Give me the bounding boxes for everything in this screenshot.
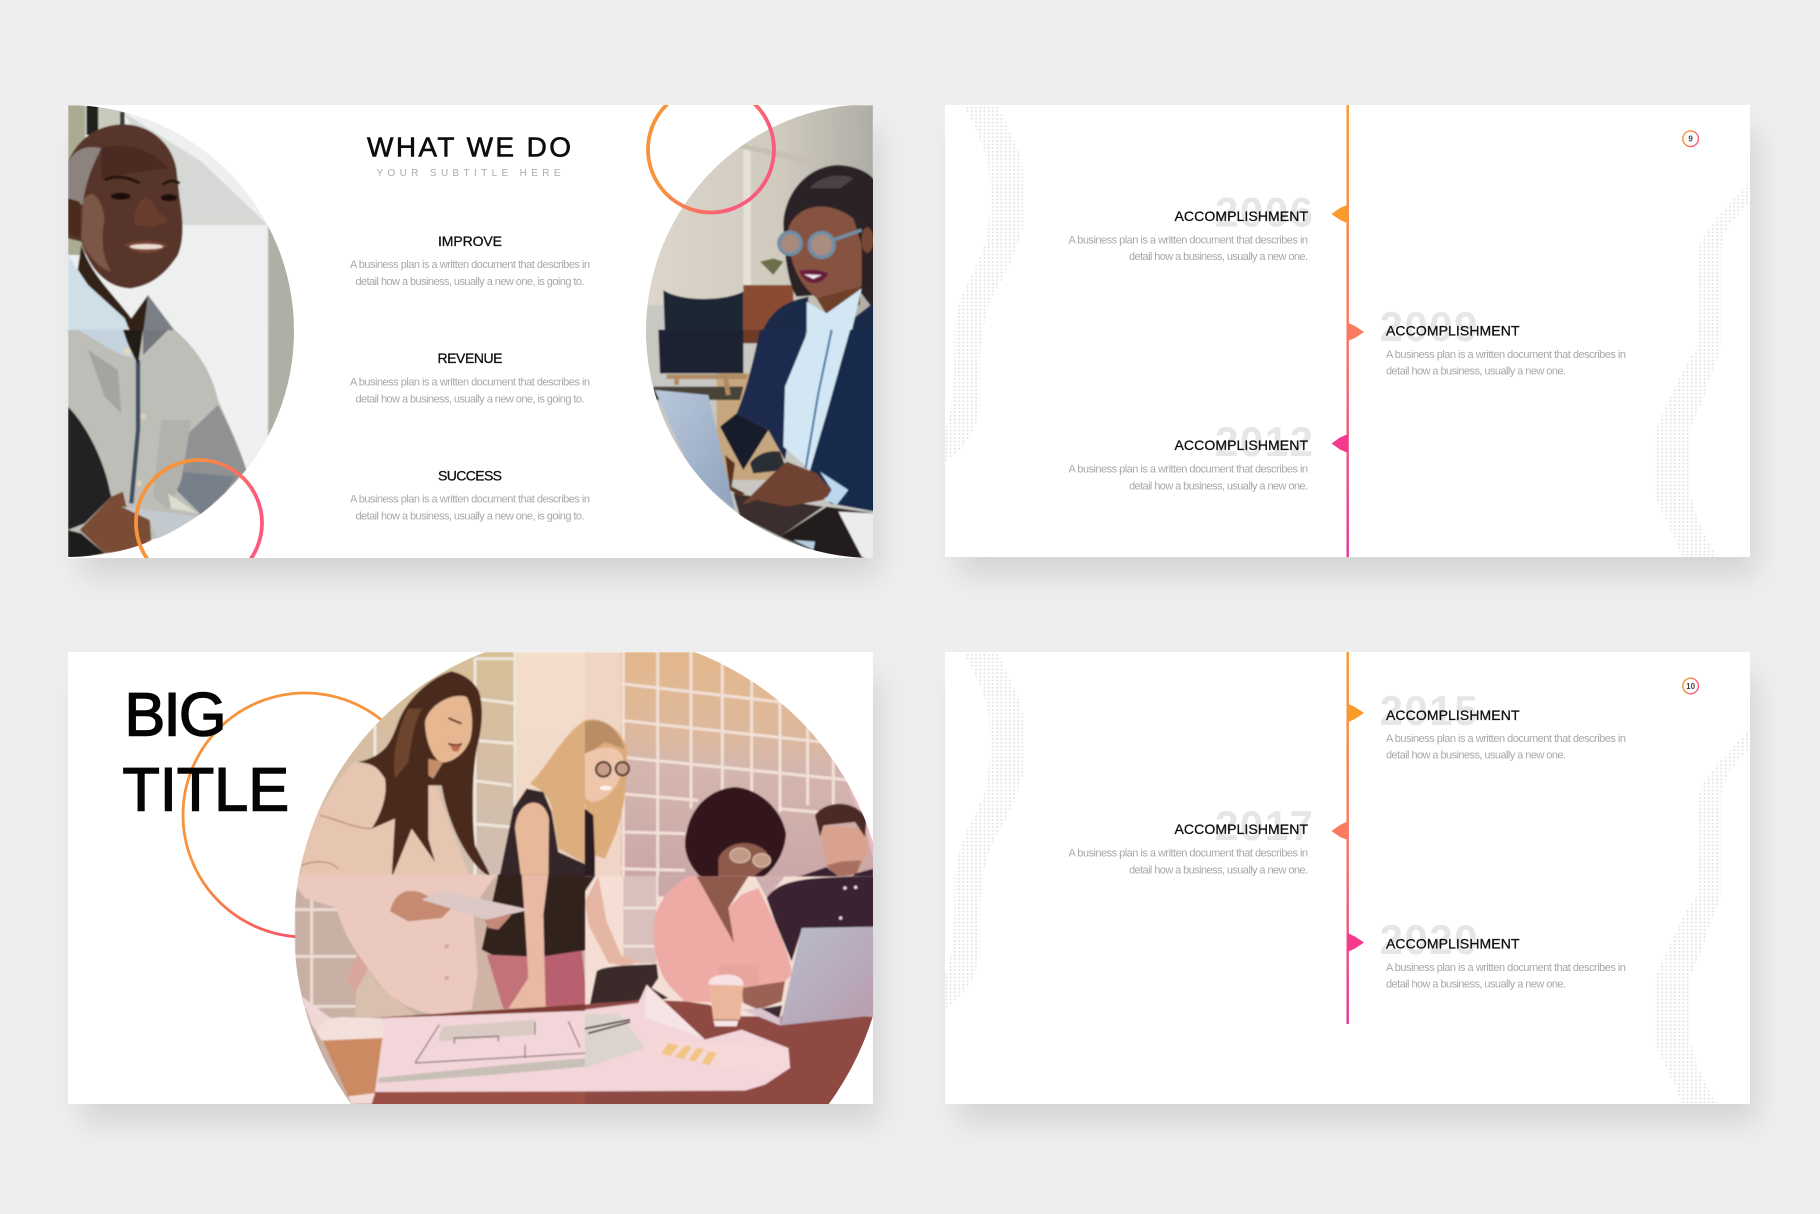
title: big title bbox=[122, 681, 289, 824]
item: 2009: detail how a business, usually a new one. bbox=[1386, 366, 1566, 378]
block: revenue: A business plan is a written document that describes in bbox=[350, 376, 590, 388]
photo part: table, laptop, swatches bbox=[585, 876, 878, 1108]
dotted wave: right bbox=[1655, 182, 1750, 557]
item: 2020: A business plan is a written document that describes in bbox=[1386, 962, 1626, 974]
timeline line bbox=[1346, 105, 1349, 557]
block: success: A business plan is a written document that describes in bbox=[350, 494, 590, 506]
dotted wave: left bbox=[945, 652, 1023, 1010]
block: revenue: REVENUE bbox=[438, 350, 502, 366]
title: big title: BIG bbox=[124, 681, 226, 749]
page number 9 bbox=[1683, 131, 1698, 146]
title: WHAT WE DO bbox=[367, 132, 571, 162]
marker: 2006 bbox=[1332, 204, 1348, 224]
page number 9: 9 bbox=[1688, 134, 1693, 144]
item: 2015: detail how a business, usually a new one. bbox=[1386, 750, 1566, 762]
block: revenue bbox=[350, 350, 590, 405]
item: 2012: detail how a business, usually a new one. bbox=[1129, 480, 1308, 492]
block: revenue: detail how a business, usually a new one, is going to. bbox=[356, 393, 584, 405]
photo part: blouse, tablet, blueprint, cup bbox=[295, 875, 588, 1108]
item: 2012: ACCOMPLISHMENT bbox=[1174, 437, 1308, 453]
item: 2020: detail how a business, usually a new one. bbox=[1386, 979, 1566, 991]
item: 2012: 2012 bbox=[1215, 418, 1313, 465]
subtitle: YOUR SUBTITLE HERE bbox=[376, 168, 561, 179]
ring: bottom left bbox=[136, 460, 262, 586]
title: big title: TITLE bbox=[122, 756, 289, 824]
block: improve: A business plan is a written document that describes in bbox=[350, 259, 590, 271]
item: 2012: A business plan is a written document that describes in bbox=[1068, 464, 1308, 476]
timeline line bbox=[1346, 652, 1349, 1024]
item: 2006 bbox=[1068, 188, 1313, 263]
block: success: SUCCESS bbox=[438, 468, 502, 484]
block: improve bbox=[350, 233, 590, 288]
panel: what we do slide bbox=[68, 105, 873, 558]
item: 2006: ACCOMPLISHMENT bbox=[1174, 208, 1308, 224]
item: 2012 bbox=[1068, 418, 1313, 492]
item: 2006: A business plan is a written document that describes in bbox=[1068, 234, 1308, 246]
block: success: detail how a business, usually a new one, is going to. bbox=[356, 511, 584, 523]
item: 2015: 2015 bbox=[1380, 687, 1478, 734]
marker: 2015 bbox=[1348, 704, 1364, 722]
photo: woman in blazer at laptop bbox=[640, 105, 875, 563]
photo part: glass wall, colleagues' faces bbox=[585, 652, 878, 882]
panel: big title slide bbox=[68, 652, 873, 1104]
ring: top right bbox=[648, 86, 774, 212]
photo: team around table bbox=[295, 652, 878, 1108]
item: 2017 bbox=[1068, 802, 1313, 876]
item: 2009: 2009 bbox=[1380, 303, 1478, 350]
item: 2017: 2017 bbox=[1215, 802, 1313, 849]
item: 2009: A business plan is a written document that describes in bbox=[1386, 349, 1626, 361]
dotted wave: left bbox=[945, 105, 1023, 463]
panel: timeline slide 2015 to 2020 bbox=[945, 652, 1750, 1104]
marker: 2012 bbox=[1332, 434, 1348, 453]
item: 2006: detail how a business, usually a new one. bbox=[1129, 251, 1308, 263]
item: 2015: ACCOMPLISHMENT bbox=[1386, 707, 1520, 723]
photo: smiling man in grey shirt bbox=[68, 105, 301, 560]
item: 2017: detail how a business, usually a new one. bbox=[1129, 864, 1308, 876]
page number 10: 10 bbox=[1686, 682, 1696, 691]
item: 2006: 2006 bbox=[1215, 188, 1313, 236]
marker: 2009 bbox=[1348, 322, 1364, 341]
block: improve: detail how a business, usually a new one, is going to. bbox=[356, 276, 584, 288]
item: 2015 bbox=[1380, 687, 1626, 762]
item: 2020: 2020 bbox=[1380, 916, 1478, 963]
marker: 2017 bbox=[1332, 821, 1348, 840]
panel: timeline slide 2006 to 2012 bbox=[945, 105, 1750, 557]
item: 2017: ACCOMPLISHMENT bbox=[1174, 821, 1308, 837]
item: 2020 bbox=[1380, 916, 1626, 991]
block: improve: IMPROVE bbox=[438, 233, 502, 249]
block: success bbox=[350, 468, 590, 523]
item: 2017: A business plan is a written document that describes in bbox=[1068, 848, 1308, 860]
dotted wave: right bbox=[1655, 729, 1750, 1104]
item: 2009 bbox=[1380, 303, 1626, 378]
item: 2015: A business plan is a written document that describes in bbox=[1386, 733, 1626, 745]
item: 2020: ACCOMPLISHMENT bbox=[1386, 936, 1520, 952]
photo part: woman with long hair bbox=[295, 652, 588, 882]
page number 10 bbox=[1683, 678, 1698, 694]
item: 2009: ACCOMPLISHMENT bbox=[1386, 323, 1520, 339]
ring: large bbox=[183, 693, 427, 937]
marker: 2020 bbox=[1348, 933, 1364, 952]
